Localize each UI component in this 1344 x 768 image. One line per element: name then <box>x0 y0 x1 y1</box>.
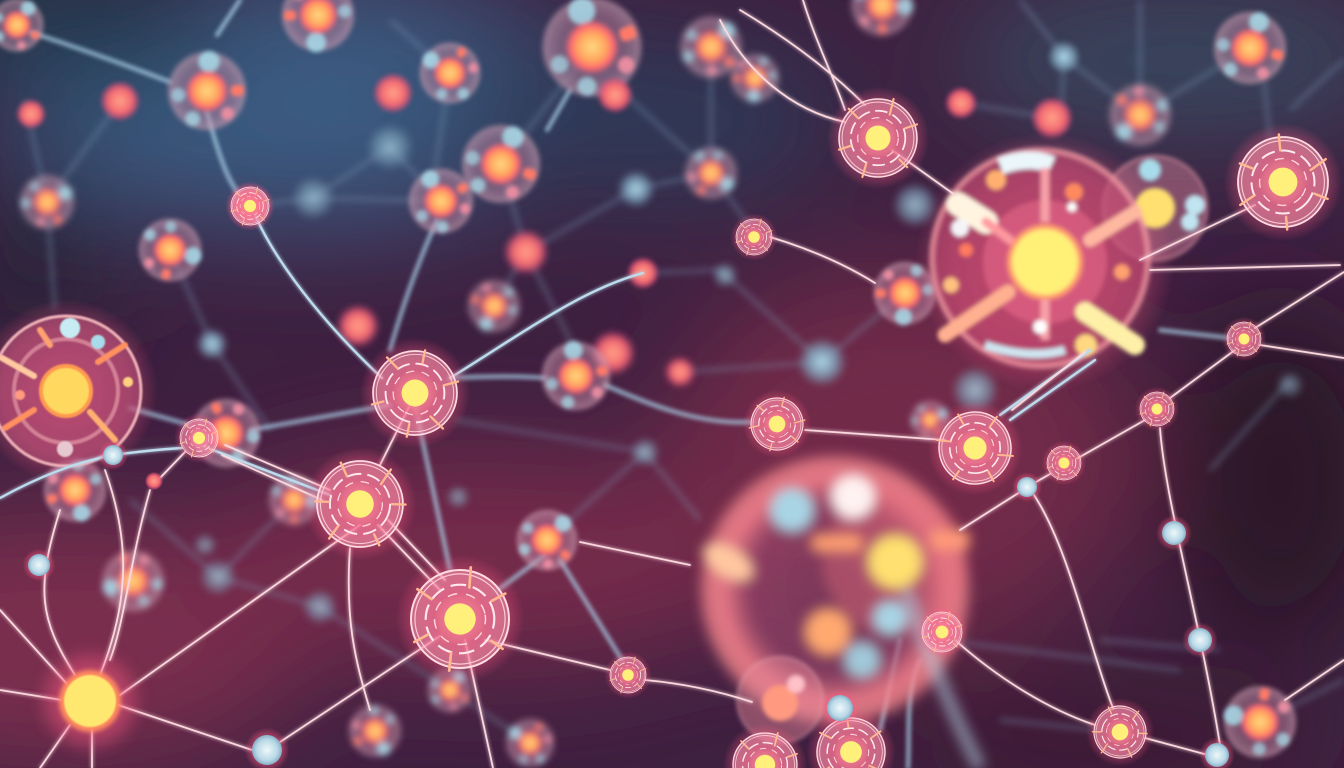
sphere in front, bottom middle <box>737 657 823 743</box>
blue-white filaments <box>0 215 1095 498</box>
large blurred sphere <box>696 452 980 768</box>
large glass sphere, upper right <box>915 132 1207 392</box>
node cluster <box>174 87 1344 768</box>
glowing yellow node, lower left <box>35 646 145 756</box>
small light nodes <box>22 440 1235 768</box>
large glass sphere, left <box>0 299 158 483</box>
